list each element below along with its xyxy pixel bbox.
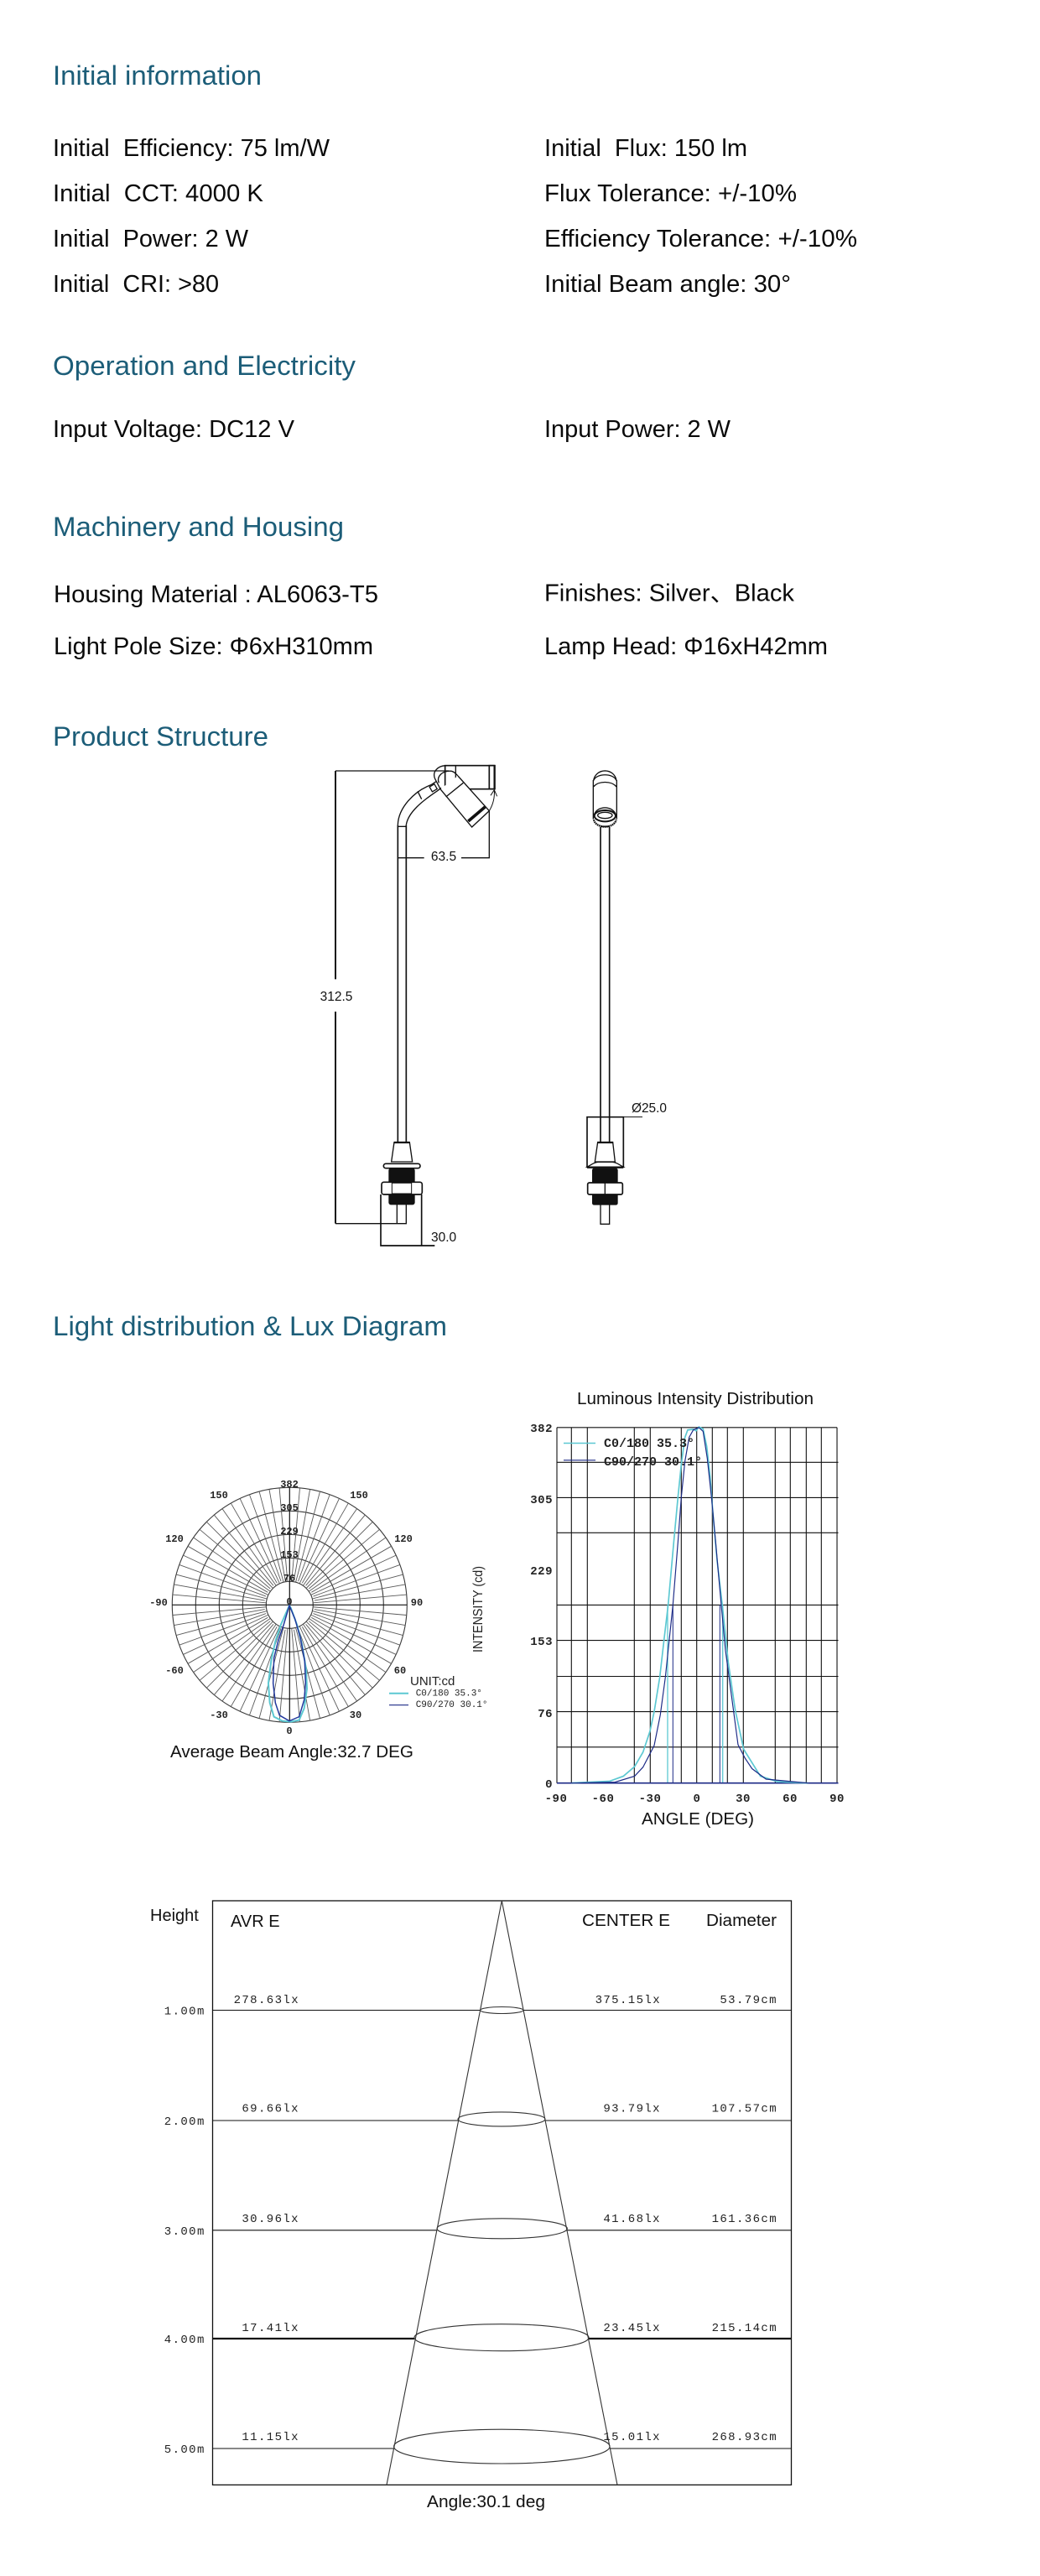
column headers: Diameter [706, 1912, 777, 1930]
chart legend: C0/180 35.3° [604, 1437, 694, 1451]
height labels: 1.00m [164, 2005, 205, 2018]
spec: finishes: Finishes: Silver、Black [544, 580, 795, 607]
spec: input power: Input Power: 2 W [544, 416, 731, 443]
polar scale labels: 305 [280, 1502, 299, 1514]
lamp head front [593, 771, 616, 827]
chart: lux diagram [150, 1901, 792, 2511]
beam diameter values: 268.93cm [712, 2431, 777, 2444]
average illuminance values: 278.63lx [234, 1994, 299, 2007]
polar scale labels: -30 [210, 1710, 228, 1721]
base, threaded mount and dimension lines [335, 771, 434, 1246]
polar scale labels: -60 [165, 1665, 184, 1677]
curve: C90/270 [572, 1428, 808, 1783]
y axis labels: 153 [530, 1636, 553, 1649]
baseline [557, 1782, 839, 1784]
polar scale labels: 382 [280, 1479, 299, 1491]
polar legend: C90/270 30.1° [416, 1700, 488, 1710]
chart: polar light distribution [149, 1479, 488, 1762]
axis title: intensity: INTENSITY (cd) [471, 1566, 486, 1652]
dimension: 312.5: 312.5 [320, 990, 352, 1004]
polar scale labels: 90 [411, 1597, 423, 1609]
spec: initial flux: Initial Flux: 150 lm [544, 135, 747, 162]
heading: Machinery and Housing: Machinery and Housing [53, 512, 344, 542]
lamp head, bent pole and 63.5 dimension [335, 766, 497, 1142]
dimension: diameter 25.0: Ø25.0 [632, 1101, 667, 1116]
beam diameter values: 161.36cm [712, 2213, 777, 2226]
spec: initial CRI: Initial CRI: >80 [53, 271, 219, 298]
beam angle markers [668, 1605, 723, 1783]
heading: Operation and Electricity: Operation and Electricity [53, 351, 356, 381]
drawing: side view of lamp [320, 766, 497, 1246]
average illuminance values: 17.41lx [242, 2322, 299, 2335]
grid [557, 1428, 839, 1783]
chart legend [564, 1437, 702, 1470]
center illuminance values: 23.45lx [603, 2322, 661, 2335]
y axis labels [530, 1423, 553, 1792]
pole, base and threaded mount [587, 827, 642, 1224]
polar scale labels: 0 [286, 1725, 293, 1737]
chart legend: C90/270 30.1° [604, 1455, 702, 1470]
center illuminance values: 15.01lx [603, 2431, 661, 2444]
beam diameter values: 215.14cm [712, 2322, 777, 2335]
x axis labels: -30 [639, 1793, 661, 1806]
beam diameter values [712, 1994, 777, 2444]
height lines [213, 2010, 792, 2449]
illuminated circles [394, 2006, 610, 2464]
x axis labels: 60 [783, 1793, 798, 1806]
beam diameter values: 107.57cm [712, 2102, 777, 2115]
average illuminance values [234, 1994, 299, 2444]
polar legend: C0/180 35.3° [416, 1689, 482, 1699]
polar curve: C90/270 [273, 1605, 305, 1721]
spec: lamp head: Lamp Head: Φ16xH42mm [544, 633, 828, 660]
heading: Product Structure: Product Structure [53, 721, 268, 752]
center illuminance values: 41.68lx [603, 2213, 661, 2226]
x axis labels: 90 [829, 1793, 845, 1806]
curve: C0/180 [572, 1427, 808, 1783]
light cone [387, 1901, 617, 2485]
dimension: 30.0: 30.0 [431, 1231, 457, 1245]
spec: housing material: Housing Material : AL6063-T5 [54, 581, 378, 608]
polar scale labels: 120 [394, 1533, 413, 1545]
polar scale labels: 150 [350, 1490, 368, 1501]
polar legend: UNIT:cd [410, 1674, 455, 1689]
center illuminance values: 93.79lx [603, 2102, 661, 2115]
average illuminance values: 11.15lx [242, 2431, 299, 2444]
column headers: Height [150, 1907, 199, 1925]
polar scale labels: 150 [210, 1490, 228, 1501]
polar curve: C0/180 [268, 1605, 307, 1722]
drawing: front view of lamp [587, 771, 667, 1224]
x axis title: ANGLE (DEG) [642, 1810, 754, 1829]
spec: initial efficiency: Initial Efficiency: 75 lm/W [53, 135, 330, 162]
spec: flux tolerance: Flux Tolerance: +/-10% [544, 180, 797, 207]
y axis labels: 305 [530, 1494, 553, 1507]
spec: efficiency tolerance: Efficiency Tolerance: +/-10% [544, 226, 857, 252]
height labels: 5.00m [164, 2443, 205, 2457]
beam diameter values: 53.79cm [720, 1994, 777, 2007]
polar scale labels: 30 [350, 1710, 361, 1721]
column headers: AVR E [231, 1912, 280, 1931]
y axis labels: 382 [530, 1423, 553, 1436]
polar scale labels: 60 [394, 1665, 406, 1677]
polar scale labels: -90 [149, 1597, 168, 1609]
polar scale labels: 153 [280, 1549, 299, 1561]
y axis labels: 229 [530, 1565, 553, 1579]
column headers: CENTER E [582, 1912, 670, 1930]
spec: beam angle: Initial Beam angle: 30° [544, 271, 791, 298]
dimension: 63.5: 63.5 [431, 850, 456, 864]
polar scale labels: 120 [165, 1533, 184, 1545]
polar grid [172, 1487, 407, 1722]
spec: initial power: Initial Power: 2 W [53, 226, 248, 252]
column headers [150, 1907, 777, 1931]
y axis labels: 0 [545, 1778, 553, 1792]
chart title: Luminous Intensity Distribution [577, 1390, 814, 1408]
x axis labels: -90 [545, 1793, 567, 1806]
caption: angle: Angle:30.1 deg [427, 2493, 545, 2511]
height labels: 4.00m [164, 2334, 205, 2347]
height labels [164, 2005, 205, 2457]
height labels: 3.00m [164, 2225, 205, 2239]
spec: input voltage: Input Voltage: DC12 V [53, 416, 294, 443]
frame [213, 1901, 792, 2485]
polar scale labels: 76 [283, 1573, 295, 1585]
spec: initial CCT: Initial CCT: 4000 K [53, 180, 263, 207]
polar scale labels [149, 1479, 423, 1737]
y axis labels: 76 [538, 1708, 553, 1721]
polar legend [389, 1674, 488, 1710]
polar scale labels: 229 [280, 1526, 299, 1538]
x axis labels [545, 1793, 845, 1806]
x axis labels: 30 [736, 1793, 751, 1806]
x axis labels: -60 [592, 1793, 614, 1806]
average illuminance values: 30.96lx [242, 2213, 299, 2226]
x axis labels: 0 [694, 1793, 700, 1806]
chart: luminous intensity distribution [530, 1390, 845, 1829]
polar scale labels: 0 [286, 1596, 293, 1608]
height labels: 2.00m [164, 2115, 205, 2129]
caption: average beam angle: Average Beam Angle:32.7 DEG [170, 1742, 413, 1762]
average illuminance values: 69.66lx [242, 2102, 299, 2115]
center illuminance values: 375.15lx [595, 1994, 661, 2007]
spec: light pole size: Light Pole Size: Φ6xH310mm [54, 633, 373, 660]
center illuminance values [595, 1994, 661, 2444]
heading: Light distribution & Lux Diagram: Light distribution & Lux Diagram [53, 1311, 447, 1341]
heading: Initial information: Initial information [53, 60, 262, 91]
